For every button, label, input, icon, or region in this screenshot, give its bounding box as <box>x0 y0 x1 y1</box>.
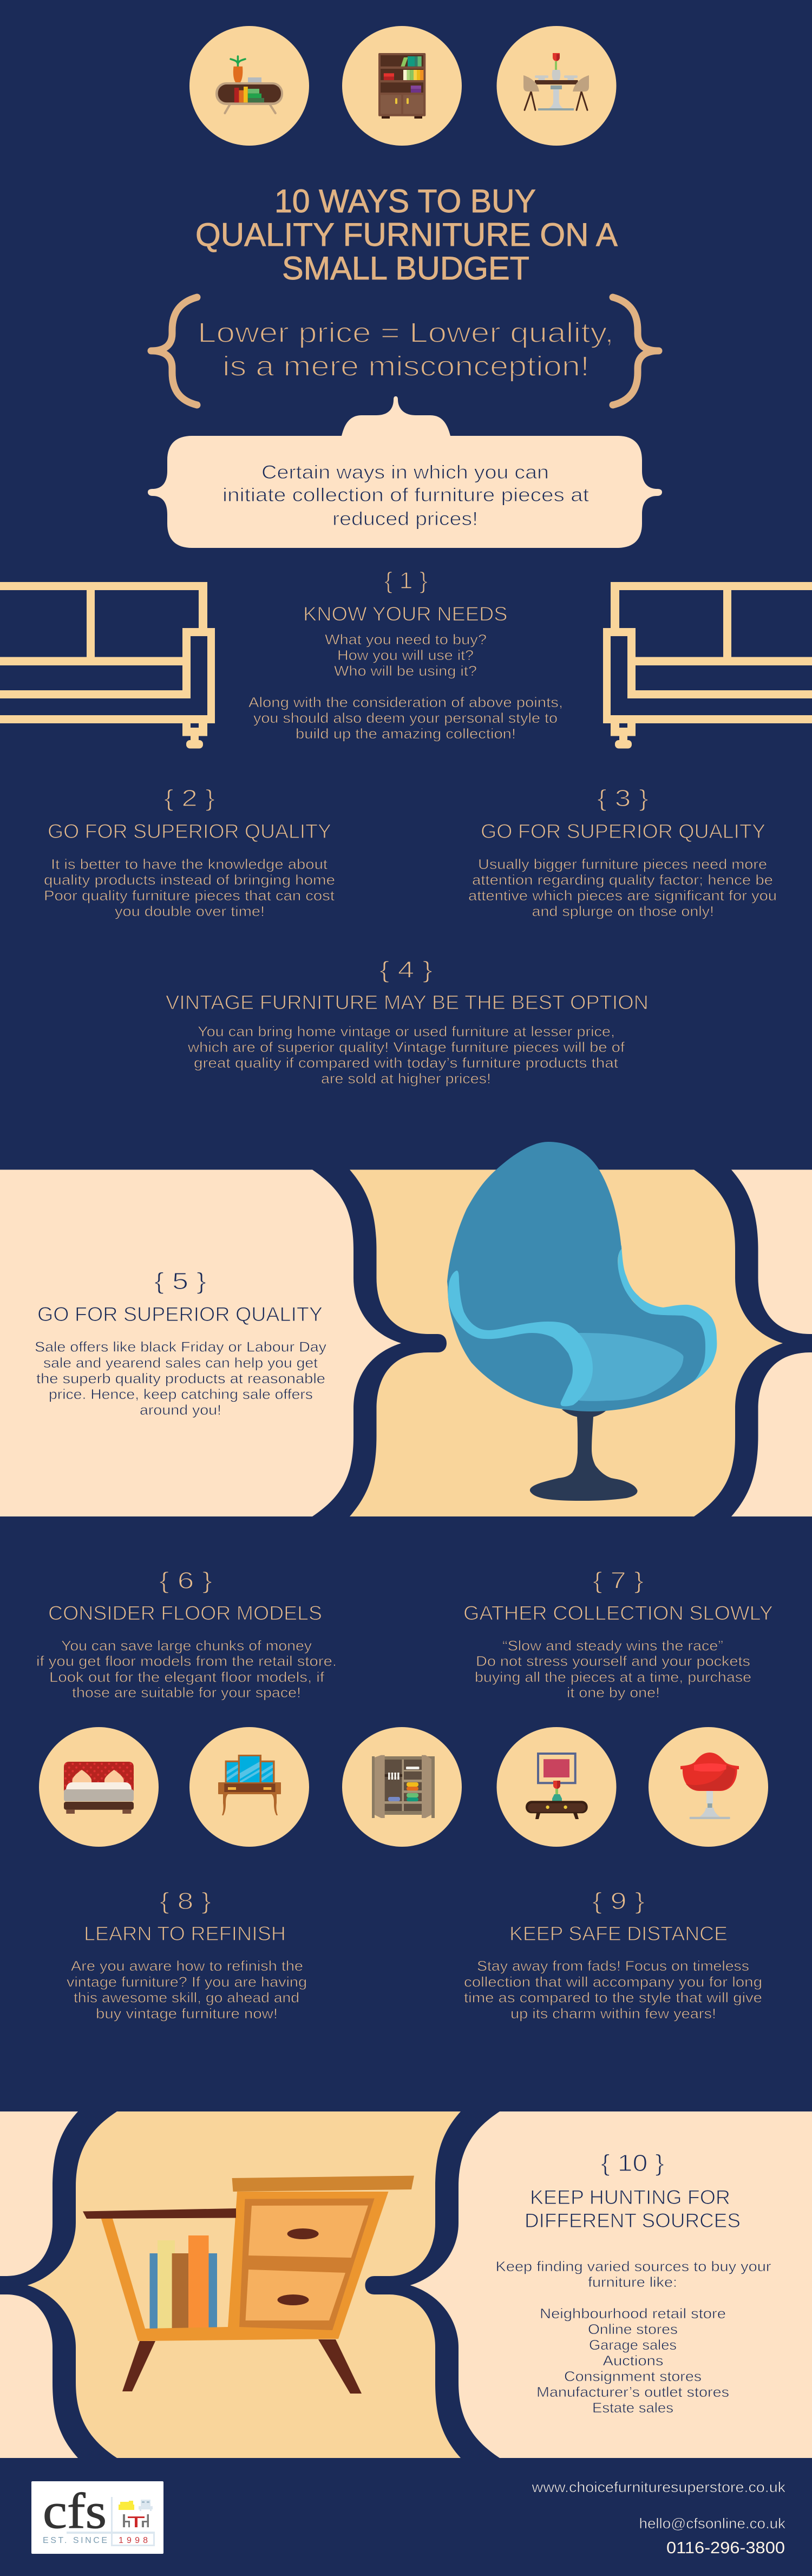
step 3: go for superior quality: { 3 } <box>597 785 649 812</box>
text: step 5: { 5 } <box>154 1268 206 1294</box>
text: step 10: KEEP HUNTING FOR <box>530 2186 730 2208</box>
step 6: consider floor models: CONSIDER FLOOR MODELS <box>48 1602 322 1624</box>
step 9: keep safe distance: collection that will accompany you for long <box>464 1974 762 1990</box>
step 1: know your needs: What you need to buy? <box>325 631 487 648</box>
brace: right navy <box>365 2111 500 2458</box>
icon: left sofa outline <box>0 582 215 748</box>
text: step 10: Online stores <box>588 2321 678 2337</box>
footer contact details: 0116-296-3800 <box>666 2538 785 2557</box>
brace: left navy <box>312 1169 447 1516</box>
text: step 5: around you! <box>140 1402 221 1418</box>
step 6: consider floor models <box>36 1567 337 1701</box>
step 2: go for superior quality <box>44 785 335 919</box>
step 8: learn to refinish: { 8 } <box>160 1888 211 1914</box>
step 3: go for superior quality: GO FOR SUPERIOR QUALITY <box>481 820 765 842</box>
step 3: go for superior quality: attentive which pieces are significant for you <box>468 887 777 904</box>
step 7: gather collection slowly: Do not stress yourself and your pockets <box>476 1653 750 1669</box>
text: step 10: Auctions <box>603 2352 664 2369</box>
icon: right sofa outline <box>603 582 812 748</box>
step 6: consider floor models: if you get floor models from the retail store. <box>36 1653 337 1669</box>
text: step 10: Consignment stores <box>564 2368 702 2384</box>
step 9: keep safe distance: up its charm within few years! <box>510 2005 716 2022</box>
text: step 10 <box>496 2150 771 2416</box>
step 4: vintage furniture: which are of superior quality! Vintage furniture pieces will be of <box>187 1039 625 1055</box>
step 8: learn to refinish: vintage furniture? If you are having <box>67 1974 307 1990</box>
icon: bed <box>39 1727 159 1847</box>
step 2: go for superior quality: It is better to have the knowledge about <box>51 856 328 872</box>
title: 10 WAYS TO BUY <box>274 183 536 219</box>
text: step 10: Manufacturer’s outlet stores <box>536 2384 729 2400</box>
step 3: go for superior quality: attention regarding quality factor; hence be <box>472 872 773 888</box>
callout: brace-shaped bubble: reduced prices! <box>332 508 478 529</box>
step 6: consider floor models: { 6 } <box>159 1567 212 1594</box>
step 2: go for superior quality: Poor quality furniture pieces that can cost <box>44 887 335 904</box>
panel fill: cream area between braces <box>350 1169 783 1516</box>
callout: brace-shaped bubble: Certain ways in which you can <box>261 462 549 483</box>
step 3: go for superior quality <box>468 785 777 919</box>
text: step 10: DIFFERENT SOURCES <box>525 2209 741 2232</box>
step 6: consider floor models: You can save large chunks of money <box>61 1637 312 1653</box>
step 8: learn to refinish: buy vintage furniture now! <box>96 2005 278 2022</box>
step 4: vintage furniture: are sold at higher prices! <box>321 1070 491 1087</box>
panel: step 5 band with chair <box>0 1142 812 1516</box>
icon: frame, flower and low table <box>497 1727 616 1847</box>
step 1: know your needs: KNOW YOUR NEEDS <box>303 603 508 625</box>
text: step 5: the superb quality products at reasonable <box>36 1370 325 1387</box>
brace: right navy <box>694 1169 812 1516</box>
step 1: know your needs <box>248 567 563 742</box>
step 7: gather collection slowly <box>463 1567 773 1701</box>
subtitle with braces: is a mere misconception! <box>222 351 590 382</box>
step 4: vintage furniture: You can bring home vintage or used furniture at lesser price, <box>198 1023 615 1039</box>
step 6: consider floor models: those are suitable for your space! <box>72 1684 301 1701</box>
step 3: go for superior quality: Usually bigger furniture pieces need more <box>478 856 767 872</box>
subtitle with braces: Lower price = Lower quality, <box>198 317 614 349</box>
step 8: learn to refinish: Are you aware how to refinish the <box>71 1958 303 1974</box>
text: step 10: Garage sales <box>589 2337 677 2353</box>
text: step 5: price. Hence, keep catching sale offers <box>49 1386 313 1402</box>
icon: blue egg chair <box>447 1142 717 1501</box>
step 9: keep safe distance: { 9 } <box>592 1888 645 1914</box>
step 9: keep safe distance: time as compared to the style that will give <box>464 1989 762 2005</box>
text: step 5: sale and yearend sales can help you get <box>43 1355 318 1371</box>
step 2: go for superior quality: { 2 } <box>164 785 215 812</box>
step 1: know your needs: Along with the consideration of above points, <box>248 694 563 710</box>
icon: red pod chair <box>649 1727 768 1847</box>
step 9: keep safe distance: Stay away from fads! Focus on timeless <box>477 1958 749 1974</box>
brace: left navy <box>0 2111 117 2458</box>
text: step 5: GO FOR SUPERIOR QUALITY <box>37 1303 323 1325</box>
text: step 10: Keep finding varied sources to buy your <box>496 2258 771 2274</box>
step 1: know your needs: build up the amazing collection! <box>296 725 516 742</box>
text: step 10: { 10 } <box>601 2150 664 2176</box>
text: step 10: Neighbourhood retail store <box>540 2305 726 2322</box>
step 7: gather collection slowly: { 7 } <box>593 1567 644 1594</box>
text: step 5 <box>35 1268 326 1418</box>
text: step 5: Sale offers like black Friday or Labour Day <box>35 1338 326 1355</box>
title: QUALITY FURNITURE ON A <box>195 217 618 253</box>
step 4: vintage furniture: great quality if compared with today’s furniture products that <box>194 1055 619 1071</box>
step 2: go for superior quality: GO FOR SUPERIOR QUALITY <box>48 820 331 842</box>
step 7: gather collection slowly: buying all the pieces at a time, purchase <box>475 1669 751 1685</box>
subtitle with braces <box>151 297 659 405</box>
icon: wardrobe <box>342 1727 462 1847</box>
step 4: vintage furniture <box>166 957 649 1087</box>
step 2: go for superior quality: quality products instead of bringing home <box>44 872 335 888</box>
step 1: know your needs: Who will be using it? <box>334 663 477 679</box>
footer contact details <box>531 2479 786 2557</box>
title: SMALL BUDGET <box>282 250 529 286</box>
step 8: learn to refinish <box>67 1888 307 2022</box>
logo: cfs: EST. SINCE <box>43 2536 107 2545</box>
title <box>195 183 618 286</box>
step 4: vintage furniture: { 4 } <box>379 957 433 983</box>
logo: cfs: cfs <box>43 2483 107 2539</box>
step 9: keep safe distance <box>464 1888 762 2022</box>
step 7: gather collection slowly: it one by one! <box>567 1684 660 1701</box>
step 6: consider floor models: Look out for the elegant floor models, if <box>49 1669 325 1685</box>
callout: brace-shaped bubble: initiate collection of furniture pieces at <box>222 485 589 506</box>
text: step 10: furniture like: <box>588 2274 677 2290</box>
step 8: learn to refinish: this awesome skill, go ahead and <box>74 1989 299 2005</box>
logo: cfs: 1998 <box>119 2536 148 2545</box>
step 7: gather collection slowly: GATHER COLLECTION SLOWLY <box>463 1602 773 1624</box>
icon: dining table with chairs <box>497 26 616 146</box>
icon: side table with books <box>83 2176 414 2394</box>
panel: step 10 band with side table <box>0 2111 812 2458</box>
step 3: go for superior quality: and splurge on those only! <box>532 903 714 919</box>
step 1: know your needs: How you will use it? <box>337 647 474 663</box>
footer contact details: hello@cfsonline.co.uk <box>639 2515 786 2532</box>
step 1: know your needs: { 1 } <box>384 567 428 594</box>
footer contact details: www.choicefurnituresuperstore.co.uk <box>531 2479 786 2495</box>
icon: console table with plant <box>189 26 309 146</box>
step 8: learn to refinish: LEARN TO REFINISH <box>84 1923 286 1945</box>
text: step 10: Estate sales <box>592 2400 673 2416</box>
step 2: go for superior quality: you double over time! <box>115 903 265 919</box>
callout: brace-shaped bubble <box>148 396 662 548</box>
panel fill: cream area between braces <box>28 2111 461 2458</box>
step 4: vintage furniture: VINTAGE FURNITURE MAY BE THE BEST OPTION <box>166 991 649 1014</box>
step 9: keep safe distance: KEEP SAFE DISTANCE <box>509 1923 728 1945</box>
logo: cfs <box>31 2481 163 2554</box>
step 7: gather collection slowly: “Slow and steady wins the race” <box>502 1637 723 1653</box>
icon: vanity table <box>189 1727 309 1847</box>
step 1: know your needs: you should also deem your personal style to <box>253 710 558 726</box>
icon: bookcase <box>342 26 462 146</box>
